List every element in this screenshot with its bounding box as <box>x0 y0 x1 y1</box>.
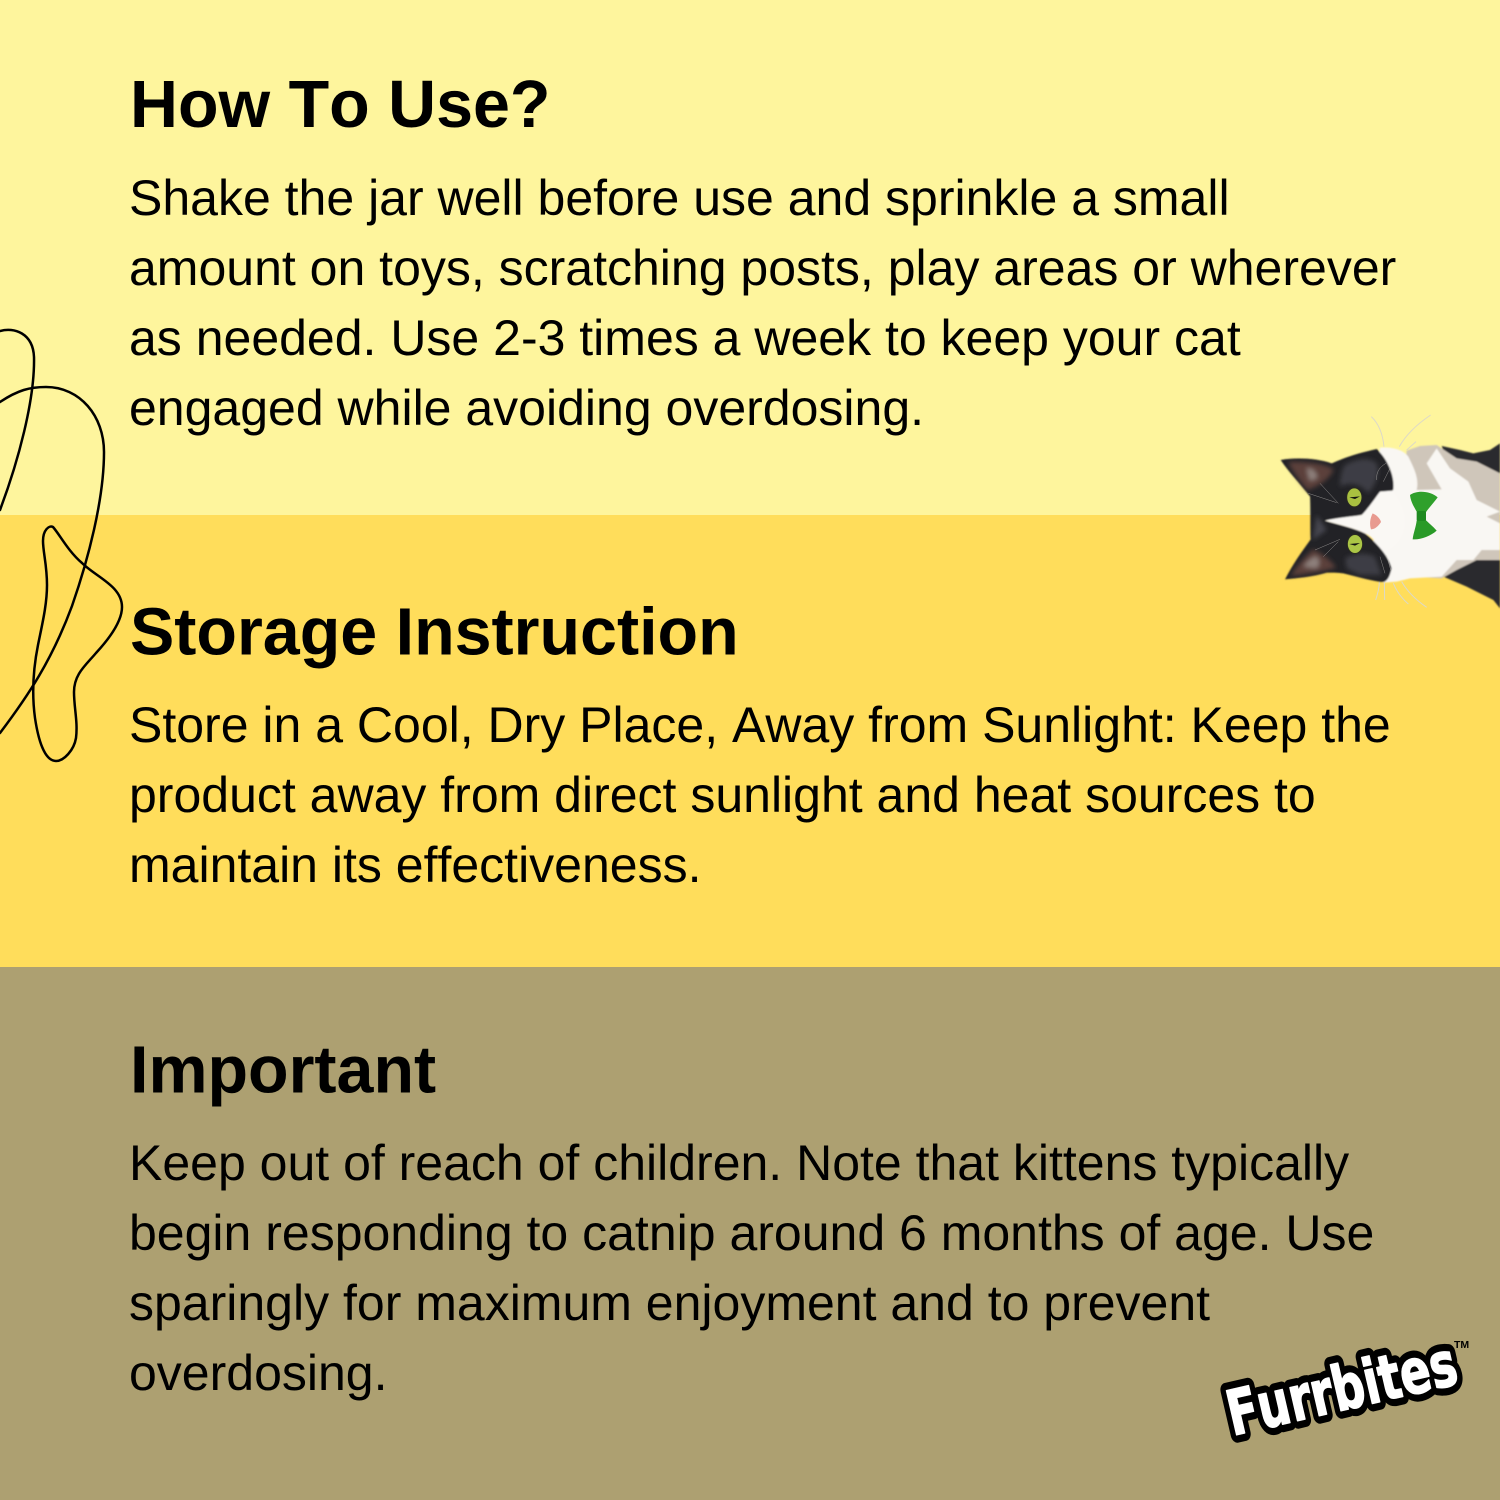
panel: important background <box>0 967 1500 1500</box>
text block: how to use instructions: amount on toys, scratching posts, play areas or wherever <box>129 240 1396 296</box>
panel: how to use background <box>0 0 1500 515</box>
greige fur <box>1403 445 1500 578</box>
green bow tie <box>1410 492 1438 513</box>
text block: storage instructions: Store in a Cool, Dry Place, Away from Sunlight: Keep the <box>129 697 1391 753</box>
text block: important notes <box>129 1135 1374 1401</box>
text block: storage instructions: maintain its effectiveness. <box>129 837 702 893</box>
soft shading on head and ears <box>1288 459 1382 576</box>
fur whisker details <box>1308 463 1391 573</box>
text block: how to use instructions <box>129 170 1396 436</box>
black head with ears <box>1281 449 1394 582</box>
text block: important notes: sparingly for maximum enjoyment and to prevent <box>129 1275 1210 1331</box>
text block: important notes: Keep out of reach of children. Note that kittens typically <box>129 1135 1349 1191</box>
heading: how to use: How To Use? <box>130 68 550 142</box>
heading: important: Important <box>130 1034 436 1108</box>
white muzzle <box>1325 491 1405 551</box>
text block: how to use instructions: Shake the jar well before use and sprinkle a small <box>129 170 1230 226</box>
text block: important notes: overdosing. <box>129 1345 388 1401</box>
nose <box>1370 513 1381 529</box>
white chest <box>1373 447 1500 583</box>
icon: tuxedo cat with green bow tie <box>1281 415 1500 608</box>
text block: how to use instructions: engaged while avoiding overdosing. <box>129 380 924 436</box>
decorative squiggle lines <box>0 330 122 761</box>
eyes <box>1346 487 1362 507</box>
dark body back <box>1442 443 1500 608</box>
text block: how to use instructions: as needed. Use 2-3 times a week to keep your cat <box>129 310 1241 366</box>
text block: storage instructions <box>129 697 1391 893</box>
panel: storage instruction background <box>0 515 1500 967</box>
trademark mark: TM <box>1454 1339 1469 1351</box>
heading: storage instruction: Storage Instruction <box>130 596 739 670</box>
whiskers <box>1371 415 1431 607</box>
text block: storage instructions: product away from direct sunlight and heat sources to <box>129 767 1316 823</box>
text block: important notes: begin responding to catnip around 6 months of age. Use <box>129 1205 1374 1261</box>
